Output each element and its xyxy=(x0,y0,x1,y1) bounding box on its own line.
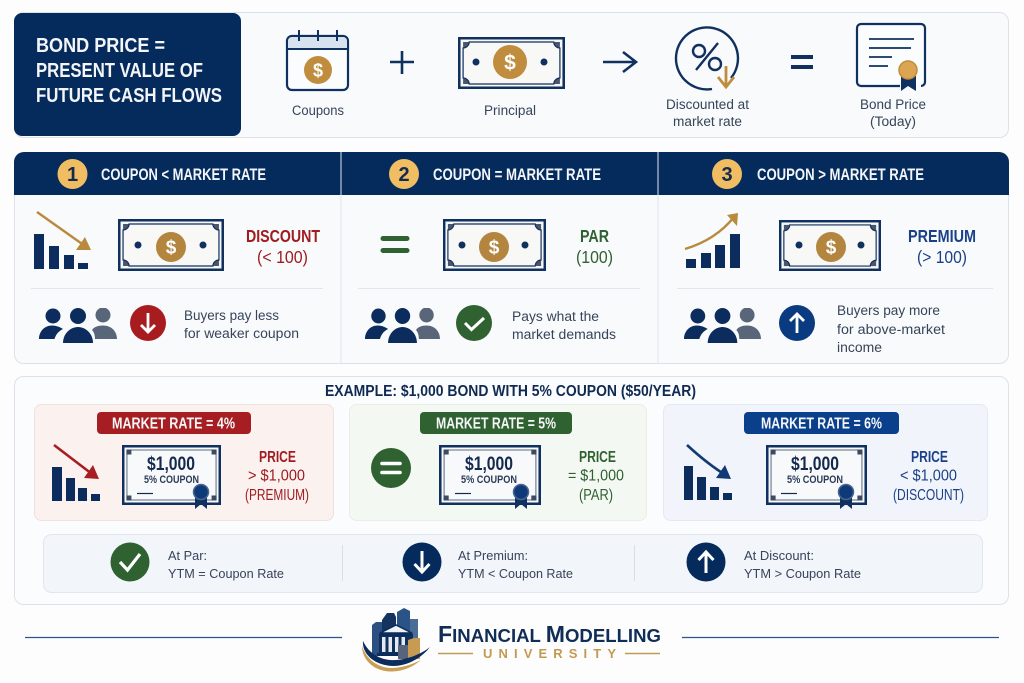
icon: falling bars navy arrow xyxy=(684,445,732,500)
text: buyers pay less: for weaker coupon xyxy=(184,326,299,341)
label: bond price today xyxy=(860,97,926,129)
logo emblem xyxy=(362,608,430,672)
arrow: to discounting xyxy=(603,52,636,72)
price: premium: PRICE xyxy=(259,449,296,466)
logo: financial modelling university xyxy=(362,608,661,672)
pill: market rate 5%: MARKET RATE = 5% xyxy=(436,416,556,432)
strip: yield to maturity summary xyxy=(44,534,982,592)
heading 1: COUPON < MARKET RATE xyxy=(101,166,266,184)
icon: banknote: $ xyxy=(166,238,177,258)
icon: plus xyxy=(390,51,414,74)
scenario 1: coupon below market xyxy=(31,159,323,343)
icon: rising bars xyxy=(685,213,740,268)
badge 1: 1 xyxy=(67,164,78,186)
title block xyxy=(14,13,241,136)
panel: formula xyxy=(14,12,1008,138)
text: pays what the market demands xyxy=(512,309,616,342)
price: discount: PRICE xyxy=(911,449,948,466)
icon: banknote: $ xyxy=(489,238,500,258)
label: discount xyxy=(246,226,320,267)
logo wordmark: FINANCIAL MODELLING xyxy=(438,621,661,647)
icon: bond certificate: 5% COUPON xyxy=(787,474,843,486)
icon: bond certificate: $1,000 xyxy=(791,454,839,475)
icon: equals xyxy=(791,57,813,67)
pill: market rate 4%: MARKET RATE = 4% xyxy=(112,416,235,432)
text: buyers pay less: Buyers pay less xyxy=(184,308,279,323)
pill: market rate 6% xyxy=(744,412,899,434)
label: premium: (> 100) xyxy=(917,247,967,267)
label: discounted at market rate: market rate xyxy=(673,114,742,129)
icon: falling bars red arrow xyxy=(52,445,100,501)
icon: coupons calendar xyxy=(287,30,348,90)
text: pays what the market demands: market demands xyxy=(512,327,616,342)
card: market rate 6% xyxy=(664,404,988,520)
badge 2: 2 xyxy=(398,164,410,186)
price: discount: (DISCOUNT) xyxy=(893,487,964,504)
pill: market rate 5% xyxy=(420,412,572,434)
pill: market rate 4% xyxy=(97,412,251,434)
label: coupons: Coupons xyxy=(292,103,344,118)
text: at premium xyxy=(458,548,573,581)
text: at premium: At Premium: xyxy=(458,548,528,563)
text: buyers pay more: income xyxy=(837,340,882,355)
badge 2 xyxy=(389,159,419,189)
price: par: = $1,000 xyxy=(568,468,624,484)
label: premium xyxy=(908,226,976,267)
icon: buyers xyxy=(684,308,761,343)
heading 3: COUPON > MARKET RATE xyxy=(757,166,924,184)
icon: up arrow xyxy=(779,305,815,341)
icon: bond certificate xyxy=(857,24,925,91)
icon: equals circle xyxy=(371,448,411,488)
icon: bond certificate xyxy=(123,446,220,509)
icon: premium down arrow xyxy=(402,542,442,582)
pill: market rate 6%: MARKET RATE = 6% xyxy=(761,416,882,432)
price: discount xyxy=(893,449,964,504)
icon: principal banknote xyxy=(459,38,564,88)
icon: down arrow xyxy=(130,305,166,341)
text: at par: YTM = Coupon Rate xyxy=(168,566,284,581)
label: bond price today: (Today) xyxy=(870,114,916,129)
card: market rate 5% xyxy=(350,404,646,520)
badge 3: 3 xyxy=(721,164,733,186)
price: premium: > $1,000 xyxy=(248,468,305,484)
label: bond price today: Bond Price xyxy=(860,97,926,112)
label: discounted at market rate xyxy=(666,97,749,129)
price: discount: < $1,000 xyxy=(900,468,957,484)
heading 2: COUPON = MARKET RATE xyxy=(433,166,601,184)
icon: principal banknote: $ xyxy=(504,52,516,74)
label: discounted at market rate: Discounted at xyxy=(666,97,749,112)
icon: banknote xyxy=(444,220,545,270)
icon: bond certificate xyxy=(440,446,540,509)
icon: bond certificate: 5% COUPON xyxy=(144,474,199,486)
icon: buyers xyxy=(39,308,117,343)
label: par: (100) xyxy=(576,247,613,267)
icon: green equals xyxy=(383,238,407,250)
icon: coupons calendar: $ xyxy=(313,60,323,80)
price: par: PRICE xyxy=(579,449,616,466)
text: buyers pay less xyxy=(184,308,299,341)
text: at par xyxy=(168,548,284,581)
icon: bond certificate: $1,000 xyxy=(465,454,513,475)
logo subline: UNIVERSITY xyxy=(483,646,616,661)
icon: falling bars xyxy=(34,212,91,269)
icon: discount rate xyxy=(676,27,738,89)
title block: BOND PRICE = xyxy=(36,34,165,57)
icon: check xyxy=(456,305,492,341)
panel: three coupon scenarios xyxy=(14,152,1009,364)
icon: banknote xyxy=(119,220,223,270)
title block: FUTURE CASH FLOWS xyxy=(36,84,222,107)
label: principal: Principal xyxy=(484,103,536,118)
scenario 2: coupon equals market xyxy=(358,159,640,343)
icon: par check xyxy=(110,542,150,582)
icon: bond certificate: $1,000 xyxy=(147,454,195,475)
icon: discount up arrow xyxy=(686,542,726,582)
text: pays what the market demands: Pays what the xyxy=(512,309,599,324)
icon: buyers xyxy=(365,308,440,343)
scenario 3: coupon above market xyxy=(677,159,993,355)
icon: banknote: $ xyxy=(826,238,837,258)
label: discount: (< 100) xyxy=(257,247,308,267)
icon: bond certificate xyxy=(767,446,866,509)
price: par: (PAR) xyxy=(579,487,613,504)
price: par xyxy=(568,449,624,504)
example heading: EXAMPLE: $1,000 BOND WITH 5% COUPON ($50/YEAR) xyxy=(325,383,696,400)
badge 1 xyxy=(58,159,88,189)
text: at discount: YTM > Coupon Rate xyxy=(744,566,861,581)
icon: banknote xyxy=(780,221,880,270)
price: premium: (PREMIUM) xyxy=(245,487,309,504)
label: premium: PREMIUM xyxy=(908,226,976,246)
text: buyers pay more xyxy=(837,303,945,355)
label: par xyxy=(576,226,613,267)
label: discount: DISCOUNT xyxy=(246,226,320,246)
text: at discount xyxy=(744,548,861,581)
text: buyers pay more: for above-market xyxy=(837,322,945,337)
text: at premium: YTM < Coupon Rate xyxy=(458,566,573,581)
text: at discount: At Discount: xyxy=(744,548,814,563)
badge 3 xyxy=(712,159,742,189)
panel: worked example xyxy=(14,376,1008,604)
price: premium xyxy=(245,449,309,504)
title block: PRESENT VALUE OF xyxy=(36,59,203,82)
label: par: PAR xyxy=(580,226,609,246)
card: market rate 4% xyxy=(34,404,334,520)
text: at par: At Par: xyxy=(168,548,207,563)
text: buyers pay more: Buyers pay more xyxy=(837,303,940,318)
icon: bond certificate: 5% COUPON xyxy=(461,474,517,486)
